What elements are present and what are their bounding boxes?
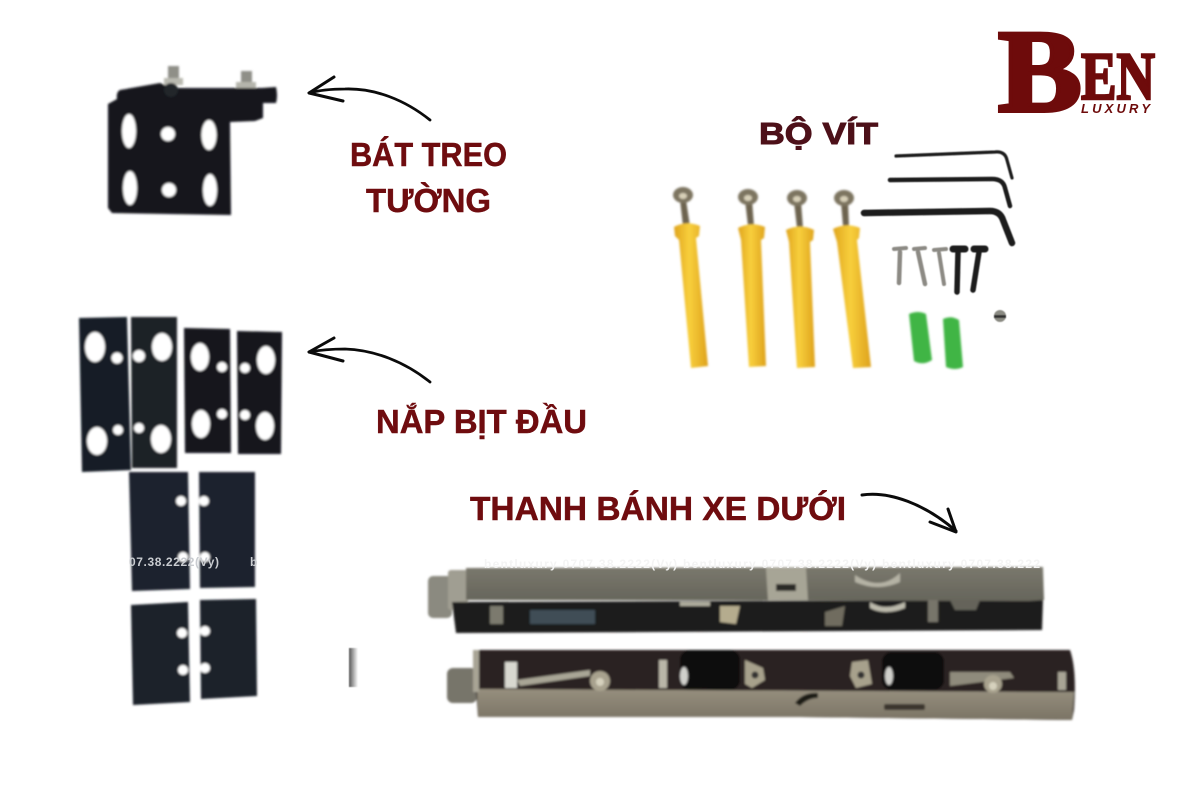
icon: green wall plugs xyxy=(909,312,963,369)
label: wall bracket: BÁT TREO xyxy=(350,136,507,173)
anchor 3 xyxy=(786,190,815,368)
icon: wall bracket xyxy=(108,66,277,215)
arrow: to end cap plates xyxy=(309,338,430,382)
icon: small screws xyxy=(894,248,985,292)
icon: hex keys xyxy=(864,152,1012,243)
label: screw kit: BỘ VÍT xyxy=(759,115,878,151)
watermark on plates: 07.38.2222(Vy) xyxy=(129,555,219,569)
logo: Ben Luxury xyxy=(998,6,1155,137)
plate A xyxy=(79,317,131,472)
rollers xyxy=(680,650,944,690)
plate E xyxy=(129,472,190,591)
anchor 2 xyxy=(738,189,766,367)
plate F xyxy=(199,472,255,588)
plate C xyxy=(184,328,231,453)
logo: Ben Luxury: LUXURY xyxy=(1081,101,1151,116)
plate G xyxy=(131,602,190,705)
plate H xyxy=(200,599,257,699)
anchor 1 xyxy=(673,187,708,368)
icon: end cap plates xyxy=(79,317,282,705)
icon: small set screw xyxy=(994,310,1006,322)
watermark on plates: b xyxy=(250,555,257,569)
watermark on upper rail: bentluxury 0707.38.2222(Vy) bentluxury 0707.38.2222(Vy) bentluxury 0707.38.222 xyxy=(484,557,1040,571)
arrow: to lower wheel bar xyxy=(862,494,956,532)
shadow fragment xyxy=(349,648,358,687)
wall bracket: holes xyxy=(122,114,217,206)
plate B xyxy=(131,317,177,468)
anchor 4 xyxy=(833,190,871,368)
label: wall bracket xyxy=(350,136,507,219)
icon: yellow wall anchors xyxy=(673,187,871,368)
label: end cap plates: NẮP BỊT ĐẦU xyxy=(376,403,587,440)
logo: Ben Luxury: B xyxy=(998,6,1082,137)
wall bracket: bolts xyxy=(164,66,256,97)
wheel bar: lower rail xyxy=(447,650,1075,720)
label: wall bracket: TƯỜNG xyxy=(366,182,491,219)
arrow: to wall bracket xyxy=(309,77,430,120)
label: lower wheel bar: THANH BÁNH XE DƯỚI xyxy=(470,490,846,527)
plate D xyxy=(237,331,282,454)
logo: Ben Luxury: EN xyxy=(1081,38,1155,114)
wheel bar: upper rail xyxy=(428,557,1044,633)
